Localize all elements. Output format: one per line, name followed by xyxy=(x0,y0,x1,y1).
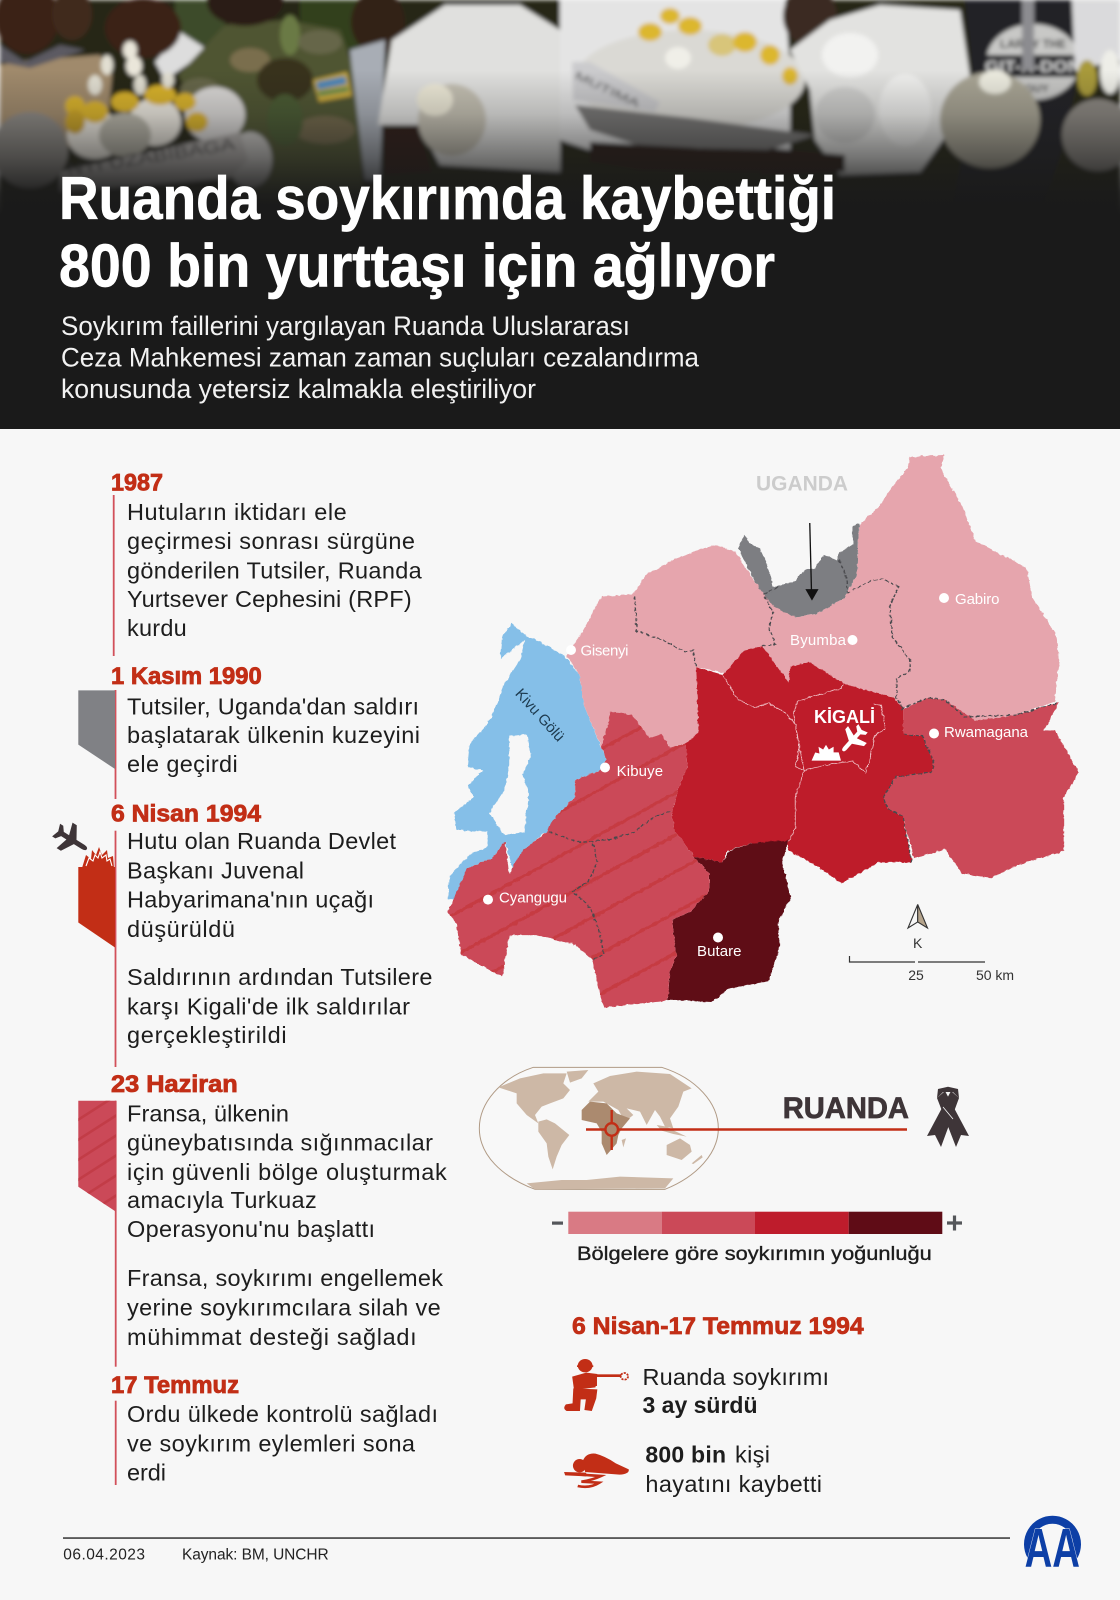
lake label: Kivu Gölü xyxy=(512,685,568,745)
header band xyxy=(0,215,1120,429)
icon: kneeling soldier xyxy=(564,1359,628,1411)
scale bar: 25 xyxy=(908,967,924,983)
timeline entry: 23 Haziran: yerine soykırımcılara silah ve xyxy=(127,1295,441,1321)
logo: AA xyxy=(1025,1517,1080,1579)
scale bar: 50 km xyxy=(976,967,1014,983)
timeline entry: 23 Haziran: Fransa, ülkenin xyxy=(127,1101,289,1127)
locator world map xyxy=(479,1067,718,1189)
subtitle: Ceza Mahkemesi zaman zaman suçluları cezalandırma xyxy=(61,342,699,372)
region: Rwamagana xyxy=(883,698,1079,878)
stat: deaths: hayatını kaybetti xyxy=(645,1471,822,1497)
stat: deaths xyxy=(564,1442,822,1497)
timeline entry: 1987 xyxy=(111,470,423,656)
timeline entry: 6 Nisan 1994: Habyarimana'nın uçağı xyxy=(127,886,374,912)
city: Rwamagana: Rwamagana xyxy=(944,724,1029,741)
region: central provinces xyxy=(672,646,934,883)
tag: hatched region xyxy=(78,1100,116,1211)
icon: mourning ribbon xyxy=(927,1087,969,1147)
timeline entry: 23 Haziran xyxy=(70,1071,447,1367)
subtitle xyxy=(61,311,699,404)
timeline entry: 17 Temmuz: Ordu ülkede kontrolü sağladı xyxy=(127,1401,438,1427)
timeline entry: 6 Nisan 1994: gerçekleştirildi xyxy=(127,1022,287,1048)
region: Uganda-held north xyxy=(738,524,859,617)
timeline entry: 1987: kurdu xyxy=(127,615,187,641)
timeline entry: 1 Kasım 1990: Tutsiler, Uganda'dan saldırı xyxy=(127,693,419,719)
footer: source: Kaynak: BM, UNCHR xyxy=(182,1546,329,1563)
timeline entry: 23 Haziran: Fransa, soykırımı engellemek xyxy=(127,1265,443,1291)
arrow: advance from Uganda xyxy=(805,523,819,601)
country label: Uganda: UGANDA xyxy=(756,472,848,496)
timeline entry: 6 Nisan 1994 xyxy=(48,800,433,1067)
timeline entry: 23 Haziran: için güvenli bölge oluşturmak xyxy=(127,1159,447,1185)
scale bar xyxy=(850,956,1014,983)
intensity legend xyxy=(552,1212,962,1265)
timeline entry: 1987: 1987 xyxy=(111,470,163,497)
city: Cyangugu: Cyangugu xyxy=(499,890,567,907)
timeline entry: 23 Haziran: mühimmat desteği sağladı xyxy=(127,1324,417,1350)
capital: Kigali with plane crash icon: KİGALİ xyxy=(814,707,875,727)
timeline entry: 1987: gönderilen Tutsiler, Ruanda xyxy=(127,558,423,584)
title: Ruanda soykırımda kaybettiği xyxy=(59,165,836,232)
Rwanda locator: crosshair, line and label: RUANDA xyxy=(783,1092,909,1125)
subtitle: Soykırım faillerini yargılayan Ruanda Uluslararası xyxy=(61,311,630,341)
timeline entry: 6 Nisan 1994: düşürüldü xyxy=(127,916,235,942)
footer: date: 06.04.2023 xyxy=(63,1546,145,1563)
header photo: mourners with bouquets: LARRY THE xyxy=(1000,37,1066,51)
Rwanda locator: crosshair, line and label xyxy=(586,1092,909,1150)
header photo: mourners with bouquets: NTI UZABIBAGA xyxy=(66,134,237,180)
intensity legend: Bölgelere göre soykırımın yoğunluğu xyxy=(577,1244,932,1265)
stat: deaths: kişi xyxy=(735,1442,770,1468)
timeline entry: 6 Nisan 1994: 6 Nisan 1994 xyxy=(111,800,262,827)
timeline entry: 6 Nisan 1994: Başkanı Juvenal xyxy=(127,858,304,884)
timeline entry: 17 Temmuz: 17 Temmuz xyxy=(111,1372,239,1399)
tag: grey Uganda region xyxy=(78,690,115,769)
timeline entry: 17 Temmuz: erdi xyxy=(127,1460,166,1486)
timeline entry: 17 Temmuz xyxy=(111,1372,438,1486)
north arrow xyxy=(908,904,928,951)
timeline entry: 1 Kasım 1990: 1 Kasım 1990 xyxy=(111,663,262,690)
timeline entry: 1987: Hutuların iktidarı ele xyxy=(127,499,347,525)
header photo: mourners with bouquets: GIT-R-DON xyxy=(985,57,1081,76)
timeline entry: 23 Haziran: 23 Haziran xyxy=(111,1071,238,1098)
summary heading: 6 Nisan-17 Temmuz 1994 xyxy=(572,1313,864,1340)
city: Gisenyi: Gisenyi xyxy=(580,642,628,660)
capital: Kigali with plane crash icon xyxy=(811,707,875,761)
region: Butare xyxy=(668,840,791,1002)
city: Butare: Butare xyxy=(697,943,742,960)
map of Rwanda xyxy=(448,454,1078,1008)
timeline entry: 17 Temmuz: ve soykırım eylemleri sona xyxy=(127,1431,416,1457)
timeline entry: 23 Haziran: amacıyla Turkuaz xyxy=(127,1187,317,1213)
title xyxy=(59,165,836,300)
timeline xyxy=(48,470,447,1486)
region: hatched southwest (French zone) xyxy=(448,711,710,1008)
timeline entry: 1987: Yurtsever Cephesini (RPF) xyxy=(127,586,412,612)
timeline entry: 6 Nisan 1994: Hutu olan Ruanda Devlet xyxy=(127,828,396,854)
title: 800 bin yurttaşı için ağlıyor xyxy=(59,232,775,300)
timeline entry: 1987: geçirmesi sonrası sürgüne xyxy=(127,528,415,554)
icon: fallen body xyxy=(564,1454,629,1487)
subtitle: konusunda yetersiz kalmakla eleştiriliyor xyxy=(61,374,536,404)
stat: deaths: 800 bin xyxy=(645,1442,726,1468)
stat: duration: 3 ay sürdü xyxy=(642,1392,758,1418)
header photo: mourners with bouquets: MUTIMA xyxy=(573,70,642,111)
tag: dark red region xyxy=(78,867,115,948)
icon: explosion xyxy=(82,847,114,868)
timeline entry: 1 Kasım 1990: başlatarak ülkenin kuzeyini xyxy=(127,722,420,748)
logo: AA: AA xyxy=(1025,1517,1080,1579)
city: Kibuye: Kibuye xyxy=(617,763,663,780)
timeline entry: 1 Kasım 1990: ele geçirdi xyxy=(127,751,238,777)
timeline entry: 23 Haziran: Operasyonu'nu başlattı xyxy=(127,1216,375,1242)
timeline entry: 6 Nisan 1994: Saldırının ardından Tutsilere xyxy=(127,964,432,990)
north arrow: K xyxy=(913,935,923,951)
footer rule xyxy=(63,1537,1010,1539)
city: Byumba: Byumba xyxy=(790,632,847,649)
lake Kivu xyxy=(448,623,606,899)
region: northern provinces xyxy=(566,455,1059,750)
icon: shot-down plane xyxy=(48,817,95,862)
header photo: mourners with bouquets xyxy=(0,0,1120,220)
timeline entry: 23 Haziran: güneybatısında sığınmacılar xyxy=(127,1130,433,1156)
stat: duration: Ruanda soykırımı xyxy=(642,1364,829,1390)
timeline entry: 1 Kasım 1990 xyxy=(78,663,420,799)
city: Butare xyxy=(697,932,742,960)
timeline entry: 6 Nisan 1994: karşı Kigali'de ilk saldırılar xyxy=(127,994,410,1020)
stat: duration xyxy=(564,1359,829,1418)
header photo: mourners with bouquets: GUY xyxy=(1025,83,1050,95)
city: Gabiro: Gabiro xyxy=(955,591,1000,608)
